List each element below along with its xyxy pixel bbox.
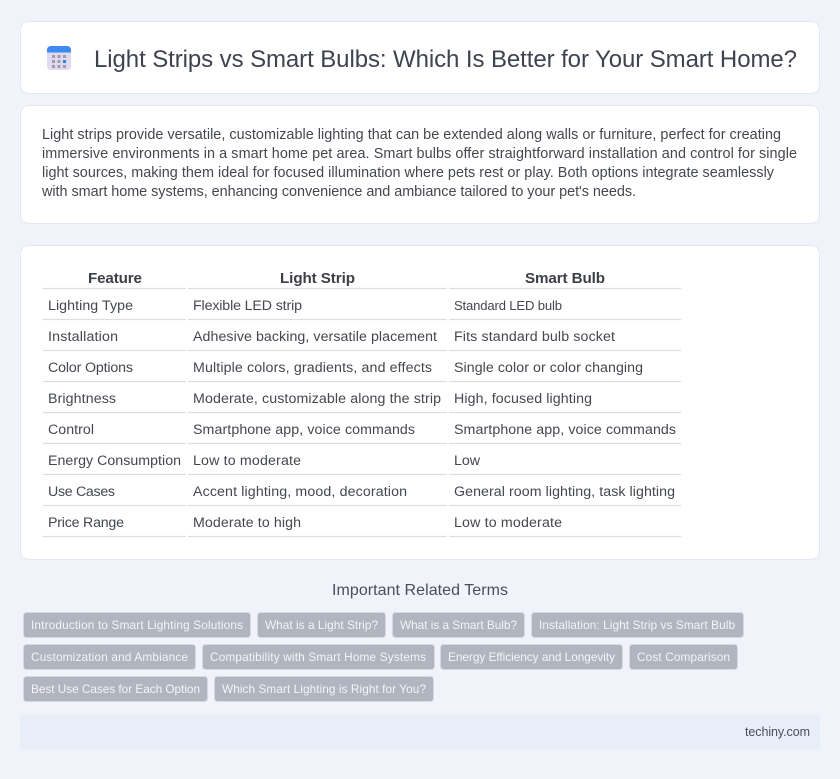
footer — [20, 715, 820, 749]
heading: related terms: Important Related Terms — [332, 582, 508, 599]
chip: energy efficiency: Energy Efficiency and Longevity — [448, 650, 615, 664]
text block: introduction paragraph — [41, 127, 797, 200]
chip: installation — [532, 612, 744, 638]
table row: energy consumption: Low — [454, 453, 481, 469]
table row: price range: Low to moderate — [454, 515, 562, 531]
table row: lighting type: Flexible LED strip — [193, 298, 302, 314]
table header: Smart Bulb — [525, 270, 605, 287]
table row: installation: Adhesive backing, versatile placement — [193, 329, 437, 345]
panel: comparison table — [20, 246, 820, 560]
icon: smart home panel — [47, 46, 71, 70]
table header — [88, 270, 605, 287]
chip: energy efficiency — [440, 644, 622, 670]
table row: price range — [48, 515, 562, 531]
table row: lighting type: Lighting Type — [48, 298, 133, 314]
chip: introduction: Introduction to Smart Lighting Solutions — [31, 618, 243, 632]
table row: color options: Color Options — [48, 360, 133, 376]
chip: use cases — [24, 676, 208, 702]
table row: color options: Multiple colors, gradients, and effects — [193, 360, 432, 376]
footer credit: techiny.com — [745, 725, 810, 739]
related term chips — [24, 612, 744, 702]
chip: cost — [630, 644, 738, 670]
chip: customization: Customization and Ambiance — [31, 650, 188, 664]
text block: introduction paragraph: with smart home systems, enhancing convenience and ambiance tailored to your pet's needs. — [41, 184, 636, 200]
table row: use cases: Accent lighting, mood, decoration — [193, 484, 407, 500]
chip: smart bulb — [392, 612, 524, 638]
table row: lighting type — [48, 298, 562, 314]
chip: smart bulb: What is a Smart Bulb? — [400, 618, 517, 632]
table row: price range: Moderate to high — [193, 515, 301, 531]
table row: brightness: Moderate, customizable along the strip — [193, 391, 441, 407]
text block: introduction paragraph: Light strips provide versatile, customizable lighting that can be extended along walls or furniture, perfect for creating — [42, 127, 781, 143]
chip: light strip — [258, 612, 386, 638]
table row: lighting type: Standard LED bulb — [454, 298, 562, 313]
table row: energy consumption: Energy Consumption — [48, 453, 181, 469]
table row: installation: Installation — [48, 329, 118, 345]
chip: which lighting: Which Smart Lighting is Right for You? — [222, 682, 426, 696]
panel: header — [20, 22, 820, 94]
title: Light Strips vs Smart Bulbs: Which Is Better for Your Smart Home? — [94, 46, 797, 73]
chip: light strip: What is a Light Strip? — [265, 618, 378, 632]
table row: color options — [48, 360, 643, 376]
table row: energy consumption — [48, 453, 481, 469]
table row: installation — [48, 329, 615, 345]
table row: use cases — [48, 484, 675, 500]
chip: compatibility: Compatibility with Smart Home Systems — [210, 650, 426, 664]
table row: color options: Single color or color changing — [454, 360, 643, 376]
table row: brightness — [48, 391, 592, 407]
table header: Feature — [88, 270, 142, 287]
chip: which lighting — [214, 676, 434, 702]
table row: control: Smartphone app, voice commands — [193, 422, 415, 438]
table row: control: Smartphone app, voice commands — [454, 422, 676, 438]
table row: use cases: Use Cases — [48, 484, 115, 500]
chip: cost: Cost Comparison — [637, 650, 730, 664]
table row: control: Control — [48, 422, 94, 438]
chip: installation: Installation: Light Strip vs Smart Bulb — [539, 618, 735, 632]
text block: introduction paragraph: immersive environments in a smart home pet area. Smart bulbs offer straightforward installation and control for single — [42, 146, 797, 162]
chip: introduction — [24, 612, 250, 638]
table header: Light Strip — [280, 270, 355, 287]
table row: brightness: High, focused lighting — [454, 391, 592, 407]
chip: use cases: Best Use Cases for Each Option — [31, 682, 200, 696]
text block: introduction paragraph: light sources, making them ideal for focused illumination where pets rest or play. Both options integrate seamlessly — [42, 165, 775, 181]
table row: price range: Price Range — [48, 515, 124, 531]
chip: customization — [24, 644, 196, 670]
table row: control — [48, 422, 676, 438]
table row: brightness: Brightness — [48, 391, 116, 407]
table row: installation: Fits standard bulb socket — [454, 329, 615, 345]
panel: introduction — [20, 106, 820, 224]
chip: compatibility — [202, 644, 434, 670]
table row: energy consumption: Low to moderate — [193, 453, 301, 469]
table row: use cases: General room lighting, task lighting — [454, 484, 675, 500]
